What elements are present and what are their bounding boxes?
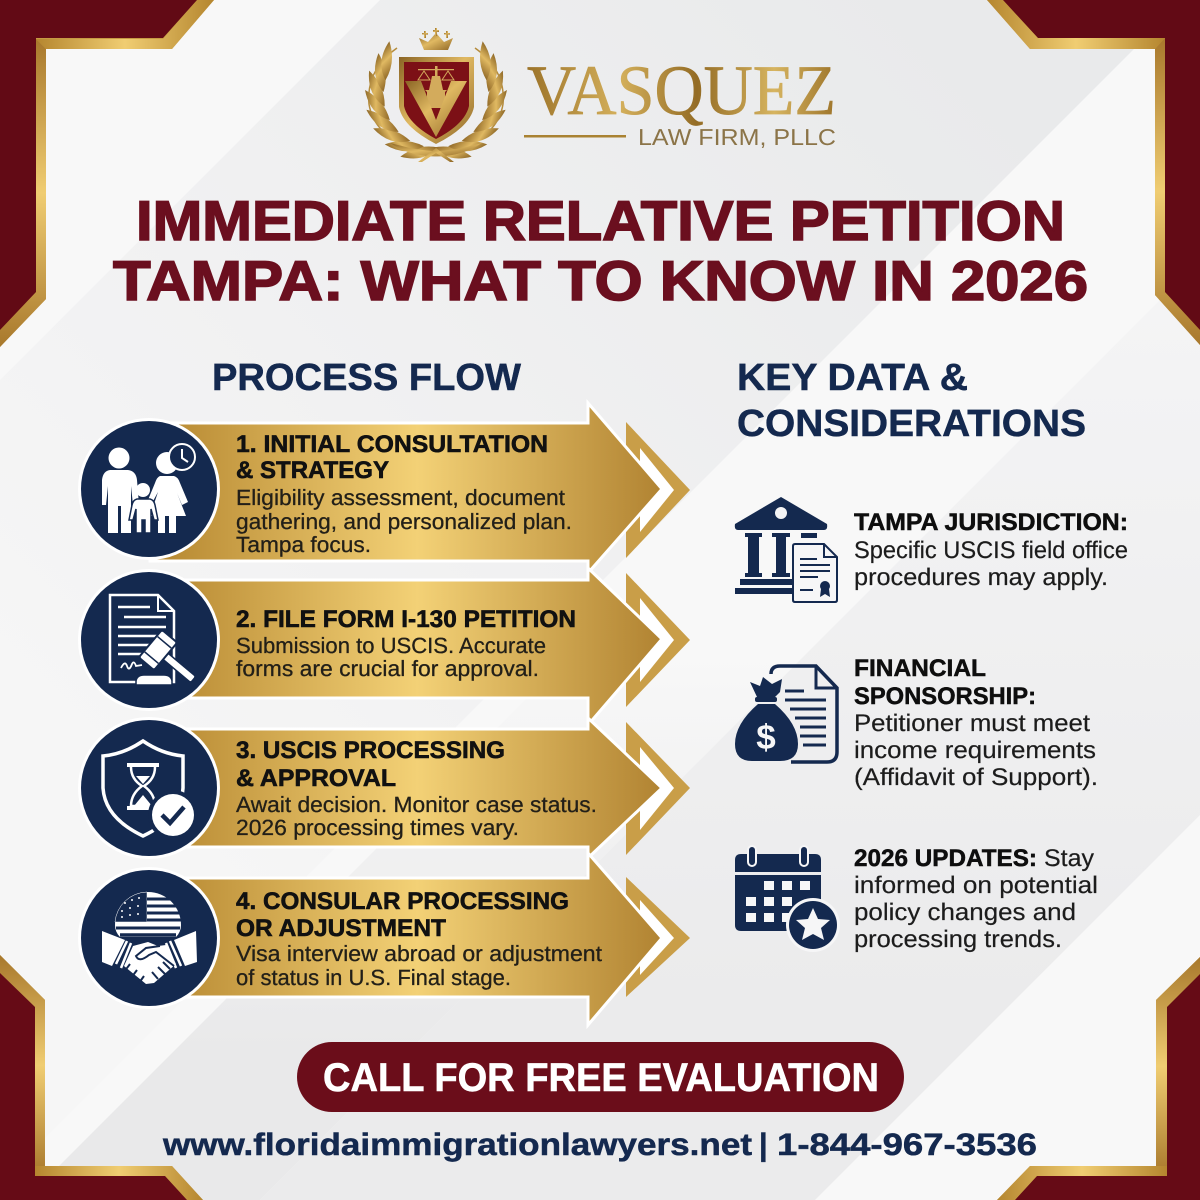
step 4 text: of status in U.S. Final stage.: [236, 965, 511, 990]
step 2 text: 2. FILE FORM I-130 PETITION: [236, 606, 576, 633]
step 2: [78, 568, 690, 725]
text: 2026 updates: 2026 UPDATES:: [854, 845, 1037, 872]
text: financial sponsorship: (Affidavit of Support).: [854, 764, 1098, 791]
logo: shield: [399, 57, 474, 144]
text: 2026 updates: Stay: [1044, 845, 1094, 872]
arrow 3: [170, 718, 662, 858]
heading: key data: KEY DATA &: [737, 357, 968, 399]
icon: courthouse and certificate: [735, 497, 837, 602]
arrow 2: [170, 568, 662, 725]
corner: bottom left: [0, 955, 203, 1200]
logo: [364, 28, 836, 162]
step 2 text: Submission to USCIS. Accurate: [236, 633, 546, 658]
icon: money bag and document: $: [756, 718, 776, 757]
chevron 3: [626, 722, 690, 855]
chevron 2: [626, 573, 690, 707]
text: tampa jurisdiction: procedures may apply.: [854, 564, 1108, 591]
corner: top left: [0, 0, 214, 347]
arrow 4: [170, 853, 662, 1025]
step 3: [78, 717, 690, 859]
step 2 text: [236, 606, 576, 681]
step 3 text: 2026 processing times vary.: [236, 815, 519, 840]
heading: key data: CONSIDERATIONS: [737, 403, 1086, 445]
logo: rule: [524, 135, 626, 138]
text: financial sponsorship: FINANCIAL: [854, 655, 986, 682]
step 1 text: [236, 431, 572, 557]
contact line: www.floridaimmigrationlawyers.net: [162, 1127, 752, 1162]
text: financial sponsorship: Petitioner must meet: [854, 710, 1090, 737]
icon: calendar and star: [735, 846, 840, 952]
text: financial sponsorship: SPONSORSHIP:: [854, 683, 1036, 710]
contact line: 1-844-967-3536: [777, 1127, 1037, 1162]
corner: top right: [987, 0, 1200, 345]
text: tampa jurisdiction: TAMPA JURISDICTION:: [854, 509, 1128, 536]
text: 2026 updates: processing trends.: [854, 926, 1062, 953]
contact line: [162, 1127, 1037, 1162]
title: [113, 189, 1088, 312]
call to action button: CALL FOR FREE EVALUATION: [323, 1056, 879, 1100]
badge 1: family and clock: [78, 418, 220, 560]
chevron 4: [626, 877, 690, 997]
handshake: [102, 931, 197, 984]
text: financial sponsorship: [854, 655, 1098, 791]
step 3 text: 3. USCIS PROCESSING: [236, 737, 505, 764]
step 4 text: [236, 888, 602, 990]
step 1 text: & STRATEGY: [236, 457, 389, 484]
arrow 1: [150, 403, 662, 573]
step 3 text: & APPROVAL: [236, 765, 396, 792]
text: 2026 updates: policy changes and: [854, 899, 1076, 926]
heading: process flow: PROCESS FLOW: [212, 357, 521, 399]
step 3 text: Await decision. Monitor case status.: [236, 792, 597, 817]
step 1 text: gathering, and personalized plan.: [236, 509, 572, 534]
step 1 text: 1. INITIAL CONSULTATION: [236, 431, 548, 458]
contact line: |: [759, 1127, 768, 1162]
title: IMMEDIATE RELATIVE PETITION: [136, 189, 1065, 252]
title: TAMPA: WHAT TO KNOW IN 2026: [113, 249, 1088, 312]
corner: bottom right: [997, 957, 1200, 1200]
logo: wordmark: VASQUEZ: [527, 52, 836, 130]
text: 2026 updates: [854, 845, 1098, 953]
logo: subtitle: LAW FIRM, PLLC: [638, 124, 836, 150]
step 3 text: [236, 737, 597, 840]
text: 2026 updates: informed on potential: [854, 872, 1098, 899]
heading: key data: [737, 357, 1086, 445]
icon: money bag and document: [735, 666, 837, 762]
chevron 1: [626, 422, 690, 558]
text: tampa jurisdiction: [854, 509, 1128, 591]
text: financial sponsorship: income requirements: [854, 737, 1096, 764]
logo: crown: [419, 28, 453, 50]
step 4 text: OR ADJUSTMENT: [236, 915, 446, 942]
badge 2: document and gavel: [78, 569, 220, 711]
step 1 text: Tampa focus.: [236, 532, 371, 557]
step 4: [78, 853, 690, 1025]
step 4 text: Visa interview abroad or adjustment: [236, 941, 602, 966]
badge 3: shield, hourglass and check: [78, 717, 220, 859]
step 2 text: forms are crucial for approval.: [236, 656, 539, 681]
logo: wreath: [364, 41, 508, 162]
badge 4: flag globe and handshake: [78, 867, 220, 1009]
step 1 text: Eligibility assessment, document: [236, 485, 565, 510]
call to action button: [297, 1042, 904, 1112]
text: tampa jurisdiction: Specific USCIS field office: [854, 537, 1128, 564]
step 4 text: 4. CONSULAR PROCESSING: [236, 888, 569, 915]
step 1: [78, 403, 690, 573]
